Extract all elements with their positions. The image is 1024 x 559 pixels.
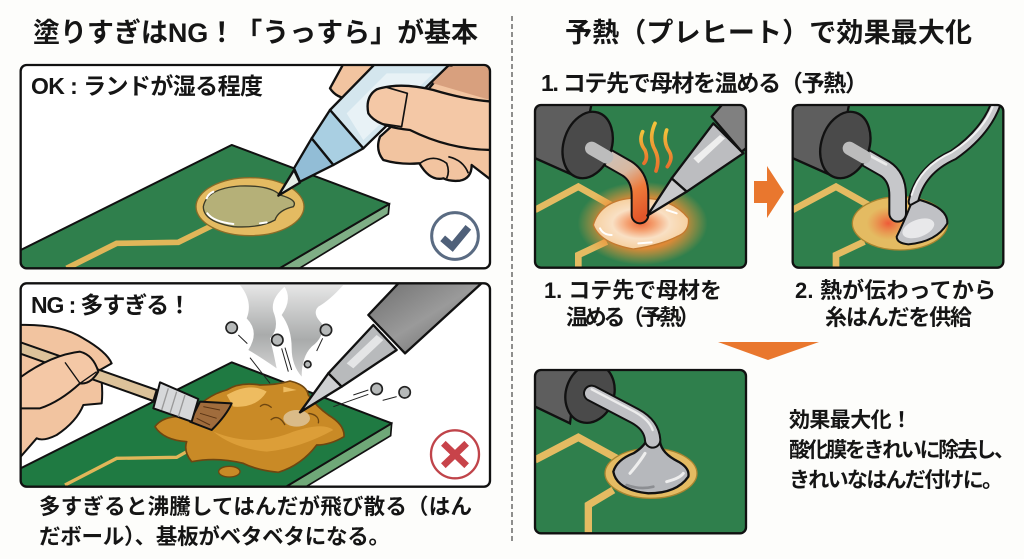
title: left: 塗りすぎはNG！「うっすら」が基本 bbox=[33, 17, 478, 48]
caption: NG panel bbox=[39, 494, 472, 549]
text: result summary: きれいなはんだ付けに。 bbox=[789, 469, 1003, 492]
solder iron right bbox=[647, 103, 750, 216]
flux puddle bbox=[155, 381, 344, 477]
flux pen bbox=[278, 64, 450, 196]
hand bbox=[330, 64, 493, 182]
label: step 2: 2. 熱が伝わってから bbox=[795, 278, 996, 303]
label: step 1: 1. コテ先で母材を bbox=[544, 278, 722, 303]
solder wire bbox=[912, 102, 997, 202]
panel: result bbox=[532, 357, 746, 533]
text: result summary bbox=[789, 409, 1015, 492]
label: step 2: 糸はんだを供給 bbox=[825, 305, 972, 330]
heat waves bbox=[641, 123, 671, 171]
smoke bbox=[240, 285, 343, 377]
iron tip bbox=[592, 389, 653, 440]
label: step 1 bbox=[544, 278, 722, 330]
divider bbox=[511, 16, 513, 541]
check mark icon bbox=[432, 213, 478, 259]
molten solder bbox=[897, 200, 947, 244]
iron body bbox=[536, 106, 614, 180]
traces bbox=[535, 187, 617, 268]
iron tip bbox=[592, 148, 640, 215]
panel: OK bbox=[17, 64, 493, 270]
land pad with flux bbox=[196, 178, 304, 236]
iron body bbox=[794, 106, 872, 180]
label: OK: OK : ランドが湿る程度 bbox=[31, 73, 263, 99]
title: right: 予熱（プレヒート）で効果最大化 bbox=[565, 18, 972, 48]
pad bbox=[852, 197, 948, 250]
soldering iron bbox=[300, 282, 483, 412]
traces bbox=[535, 437, 617, 533]
step heading: 1. コテ先で母材を温める（予熱） bbox=[541, 70, 868, 96]
label: NG: NG : 多すぎる！ bbox=[31, 292, 191, 318]
circuit board bbox=[17, 145, 389, 270]
iron tip bbox=[849, 145, 898, 213]
text: result summary: 効果最大化！ bbox=[789, 409, 912, 432]
label: step 2 bbox=[795, 278, 996, 330]
traces bbox=[793, 187, 874, 268]
hand with brush bbox=[17, 325, 232, 457]
caption: NG panel: だボール）、基板がベタベタになる。 bbox=[39, 524, 390, 549]
cross icon bbox=[431, 430, 479, 478]
label: step 1: 温める（予熱） bbox=[566, 305, 700, 330]
arrow: down bbox=[718, 342, 819, 360]
solder fillet bbox=[613, 437, 689, 493]
thumb bbox=[368, 86, 493, 150]
arrow: right bbox=[754, 166, 784, 218]
heated pad bbox=[578, 182, 708, 265]
solder balls bbox=[226, 322, 410, 407]
circuit board bbox=[17, 362, 392, 488]
panel: NG bbox=[17, 282, 490, 488]
iron body bbox=[536, 371, 616, 425]
caption: NG panel: 多すぎると沸騰してはんだが飛び散る（はん bbox=[39, 494, 472, 519]
text: result summary: 酸化膜をきれいに除去し、 bbox=[789, 439, 1015, 462]
panel: step 2 feed solder bbox=[789, 102, 1003, 268]
panel: step 1 preheat bbox=[532, 103, 750, 268]
pad bbox=[605, 448, 697, 498]
